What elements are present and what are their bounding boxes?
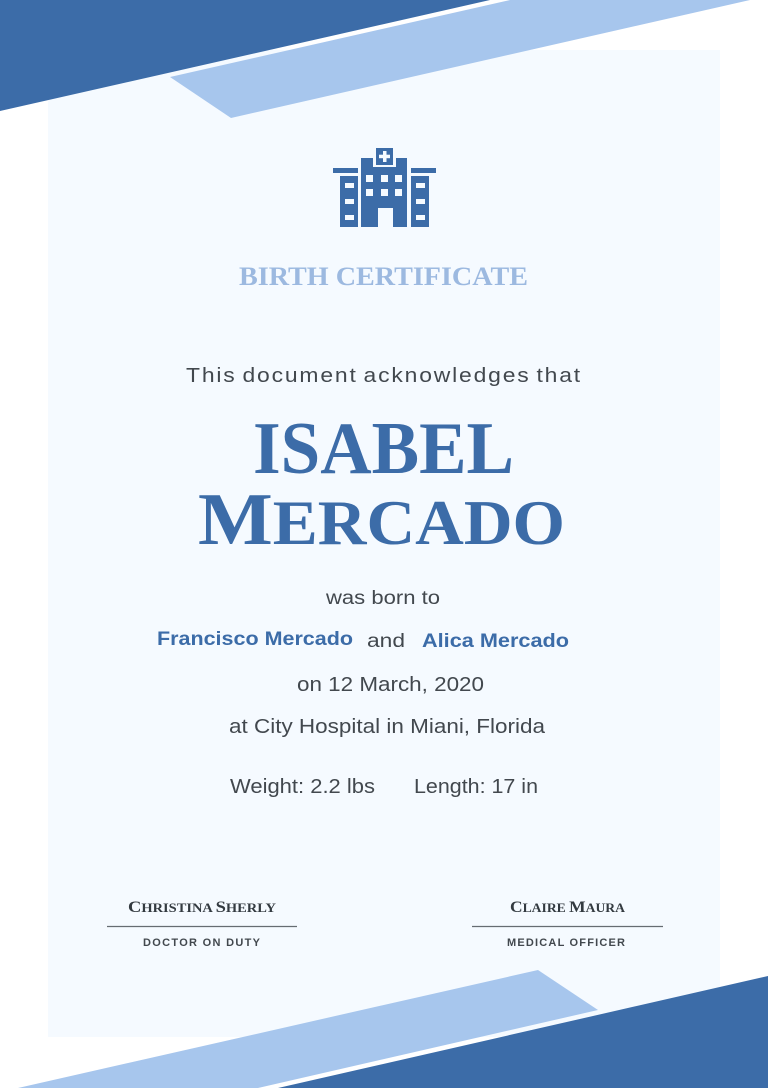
parents line bbox=[157, 629, 569, 652]
conjunction: and bbox=[367, 631, 405, 652]
bottom corner decoration bbox=[18, 970, 768, 1088]
doctor title: DOCTOR ON DUTY bbox=[143, 937, 261, 949]
signature: medical officer bbox=[472, 899, 663, 949]
officer title: MEDICAL OFFICER bbox=[507, 937, 625, 949]
weight: Weight: 2.2 lbs bbox=[230, 776, 375, 798]
birth date: on 12 March, 2020 bbox=[297, 674, 484, 696]
was born to line: was born to bbox=[325, 588, 440, 609]
heading: birth certificate: BIRTH CERTIFICATE bbox=[239, 262, 528, 291]
birth place: at City Hospital in Miani, Florida bbox=[229, 716, 546, 738]
top corner decoration bbox=[0, 0, 750, 118]
certificate panel background bbox=[48, 50, 720, 1037]
length: Length: 17 in bbox=[414, 776, 538, 798]
icon: hospital building bbox=[333, 148, 436, 227]
child last name: MERCADO bbox=[198, 479, 565, 561]
father name: Francisco Mercado bbox=[157, 629, 353, 650]
intro line: This document acknowledges that bbox=[186, 365, 582, 387]
mother name: Alica Mercado bbox=[422, 631, 569, 652]
signature: doctor on duty bbox=[107, 899, 297, 949]
child first name: ISABEL bbox=[253, 408, 514, 490]
doctor name: CHRISTINA SHERLY bbox=[128, 899, 276, 916]
officer name: CLAIRE MAURA bbox=[510, 899, 625, 916]
